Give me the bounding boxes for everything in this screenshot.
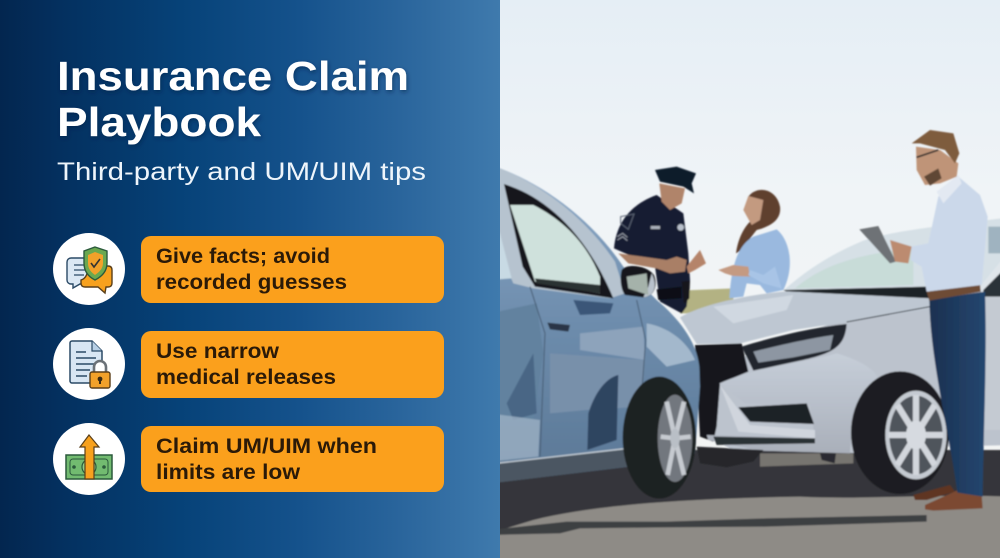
title: Playbook: [57, 99, 261, 145]
callout: tip 2: medical releases: [156, 365, 336, 389]
tip 3: [53, 423, 444, 495]
callout: tip 1: [141, 236, 444, 303]
callout: tip 2: [141, 331, 444, 398]
person: man with tablet: [859, 130, 988, 511]
callout: tip 3: [141, 426, 444, 492]
icon: document with padlock: [53, 328, 125, 400]
bumper: [707, 353, 878, 453]
tip 1: [53, 233, 444, 305]
car window: [504, 184, 613, 298]
door reflections: [573, 300, 613, 315]
hood: [680, 291, 930, 344]
person: police officer: [614, 167, 706, 313]
subtitle: Third-party and UM/UIM tips: [57, 158, 426, 186]
title: Insurance Claim: [57, 53, 409, 99]
panel: photo of accident scene: [490, 0, 1000, 558]
tablet: [859, 226, 896, 263]
callout: tip 1: recorded guesses: [156, 270, 347, 294]
road surface with shadows: [490, 450, 1000, 558]
panel: left blue text panel: [0, 0, 500, 558]
windshield: [783, 217, 1000, 297]
icon: chat bubbles with shield: [53, 233, 125, 305]
car: silver car: [680, 217, 1000, 494]
side mirror: [621, 266, 656, 297]
callout: tip 3: Claim UM/UIM when: [156, 434, 377, 458]
callout: tip 1: Give facts; avoid: [156, 244, 330, 268]
body hull: [700, 277, 1000, 453]
front wheel of silver car: [851, 371, 949, 494]
tip 2: [53, 328, 444, 400]
callout: tip 3: limits are low: [156, 460, 300, 484]
icon: banknote with rising arrow: [53, 423, 125, 495]
title: [57, 53, 409, 145]
grille: [695, 343, 748, 442]
callout: tip 2: Use narrow: [156, 339, 279, 363]
door handle: [547, 323, 570, 332]
person: woman in blue shirt: [718, 190, 790, 298]
headlight: [742, 324, 847, 371]
front wheel of blue car: [623, 377, 696, 499]
car: blue car: [490, 165, 700, 499]
horizon vegetation: [680, 288, 733, 313]
